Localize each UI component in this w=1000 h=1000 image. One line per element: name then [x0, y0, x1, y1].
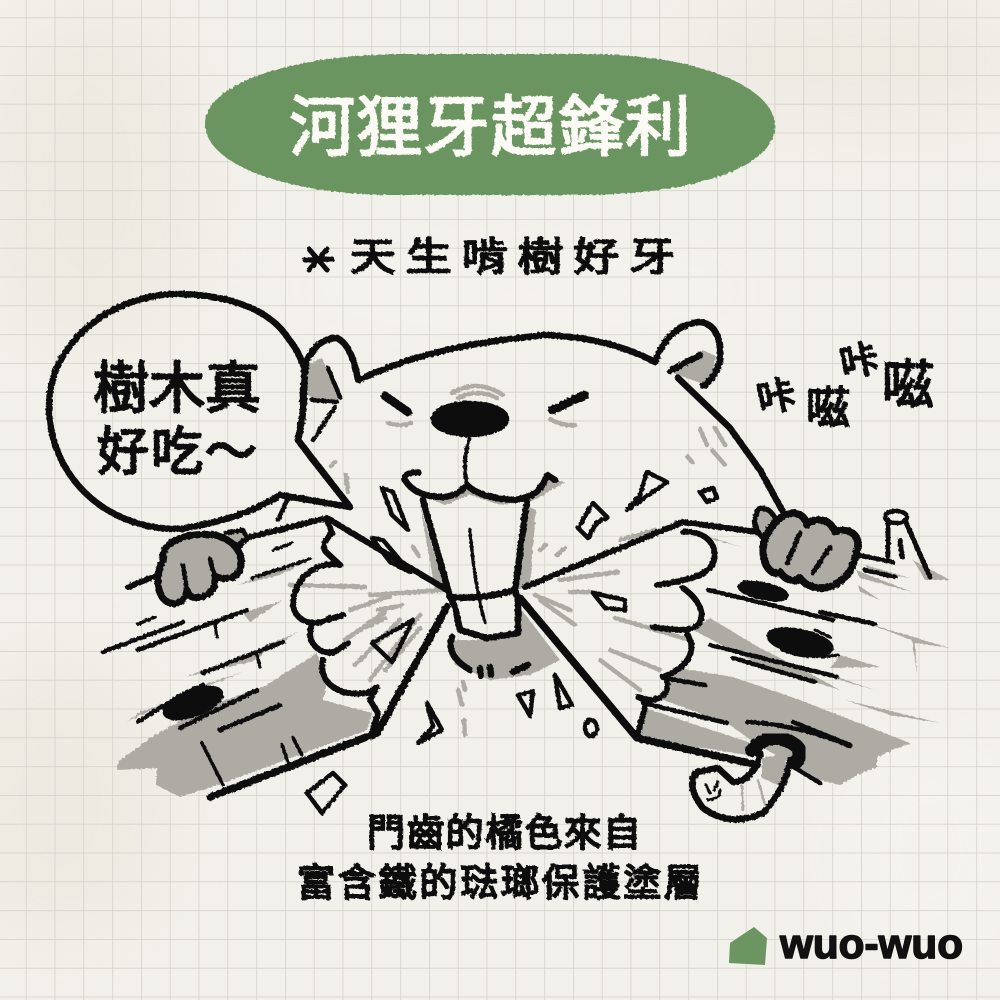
left log grey strokes	[127, 557, 317, 722]
left log shadow	[117, 653, 372, 797]
bubble text 2: 好吃～	[97, 424, 257, 482]
wood chips	[307, 472, 717, 813]
stump shadow	[913, 560, 950, 580]
stump	[888, 520, 930, 577]
philtrum and mouth	[465, 437, 470, 485]
left wood	[103, 498, 447, 797]
centre hole grey	[450, 605, 560, 680]
grey detail strokes	[290, 386, 725, 735]
nose	[434, 404, 506, 434]
title text: 河狸牙超鋒利	[289, 90, 691, 164]
ear grey	[307, 350, 716, 400]
subtitle: 天生啃樹好牙	[350, 235, 675, 279]
logo: wuo-wuo	[779, 920, 963, 967]
right wood	[520, 509, 930, 783]
sound effects: 嗞	[882, 357, 934, 415]
right log shadow	[663, 667, 910, 785]
worm grey	[762, 753, 787, 787]
right hand grey	[763, 513, 858, 588]
worm	[692, 738, 800, 819]
caption: 富含鐵的琺瑯保護塗層	[297, 863, 702, 905]
grey shading layer	[117, 350, 950, 797]
beaver head	[298, 322, 782, 676]
sound effects: 咔	[754, 373, 800, 422]
left hand	[158, 534, 241, 604]
mouth shadow	[408, 478, 565, 505]
head top and ears	[298, 338, 358, 507]
title banner	[205, 54, 775, 195]
eyes	[385, 395, 585, 412]
right hand	[763, 513, 858, 588]
caption: 門齒的橘色來自	[367, 813, 641, 855]
bubble outline	[49, 294, 350, 529]
tooth shadow	[420, 505, 536, 590]
sound effects	[754, 338, 934, 433]
left hand grey	[158, 534, 241, 604]
sound effects: 咔	[836, 338, 882, 387]
bubble text: 樹木真	[93, 357, 261, 420]
caption	[297, 813, 702, 905]
teeth	[423, 500, 527, 638]
mouth hole	[450, 637, 528, 676]
sound effects: 嗞	[806, 384, 850, 433]
